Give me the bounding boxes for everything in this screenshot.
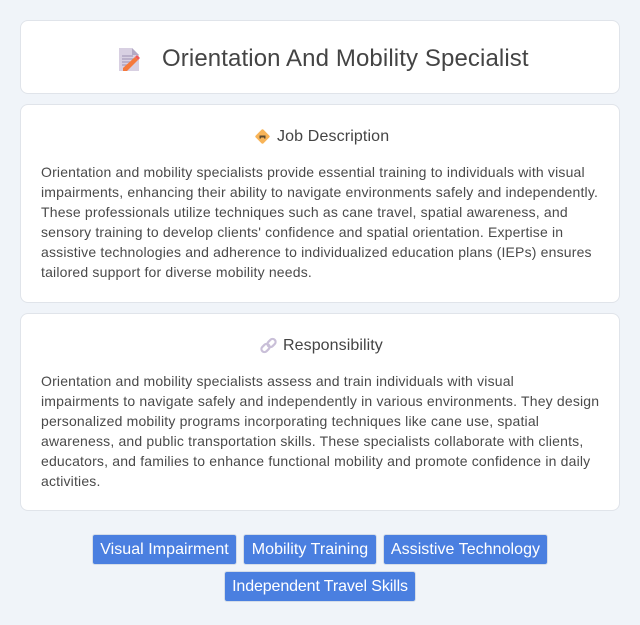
- responsibility text: awareness, and public transportation skills. These specialists collaborate with clients,: [41, 433, 583, 449]
- icon: chain link: [260, 338, 277, 354]
- icon: puzzle diamond: [255, 129, 270, 144]
- tag: visual impairment: [92, 534, 237, 565]
- title: Orientation And Mobility Specialist: [162, 45, 529, 72]
- description text: sensory training to develop clients' confidence and spatial orientation. Expertise in: [41, 224, 563, 240]
- description text: tailored support for diverse mobility needs.: [41, 264, 312, 280]
- icon: document with pencil: [119, 48, 140, 71]
- responsibility text: personalized mobility programs incorporating techniques like cane use, spatial: [41, 413, 539, 429]
- title card: [20, 20, 620, 94]
- tags: [92, 534, 548, 602]
- responsibility text: activities.: [41, 473, 101, 489]
- tag: mobility training: Mobility Training: [252, 541, 368, 558]
- heading: job description: Job Description: [277, 128, 389, 145]
- heading: responsibility: Responsibility: [283, 337, 383, 354]
- description text: assistive technologies and adherence to individualized education plans (IEPs) ensures: [41, 244, 592, 260]
- description text: impairments, enhancing their ability to navigate environments safely and independently.: [41, 184, 598, 200]
- tag: assistive technology: Assistive Technology: [391, 541, 540, 558]
- tag: mobility training: [243, 534, 377, 565]
- tag: assistive technology: [383, 534, 548, 565]
- description text: Orientation and mobility specialists provide essential training to individuals with visual: [41, 164, 585, 180]
- panel: job description: [20, 104, 620, 303]
- description text: [41, 164, 598, 280]
- responsibility text: Orientation and mobility specialists assess and train individuals with visual: [41, 373, 514, 389]
- tag: visual impairment: Visual Impairment: [100, 541, 229, 558]
- responsibility text: [41, 373, 599, 489]
- panel: responsibility: [20, 313, 620, 511]
- responsibility text: impairments to navigate safely and independently in various environments. They design: [41, 393, 599, 409]
- tag: independent travel skills: Independent Travel Skills: [232, 578, 408, 595]
- description text: These professionals utilize techniques such as cane travel, spatial awareness, and: [41, 204, 568, 220]
- responsibility text: educators, and families to enhance functional mobility and promote confidence in daily: [41, 453, 590, 469]
- tag: independent travel skills: [224, 571, 416, 602]
